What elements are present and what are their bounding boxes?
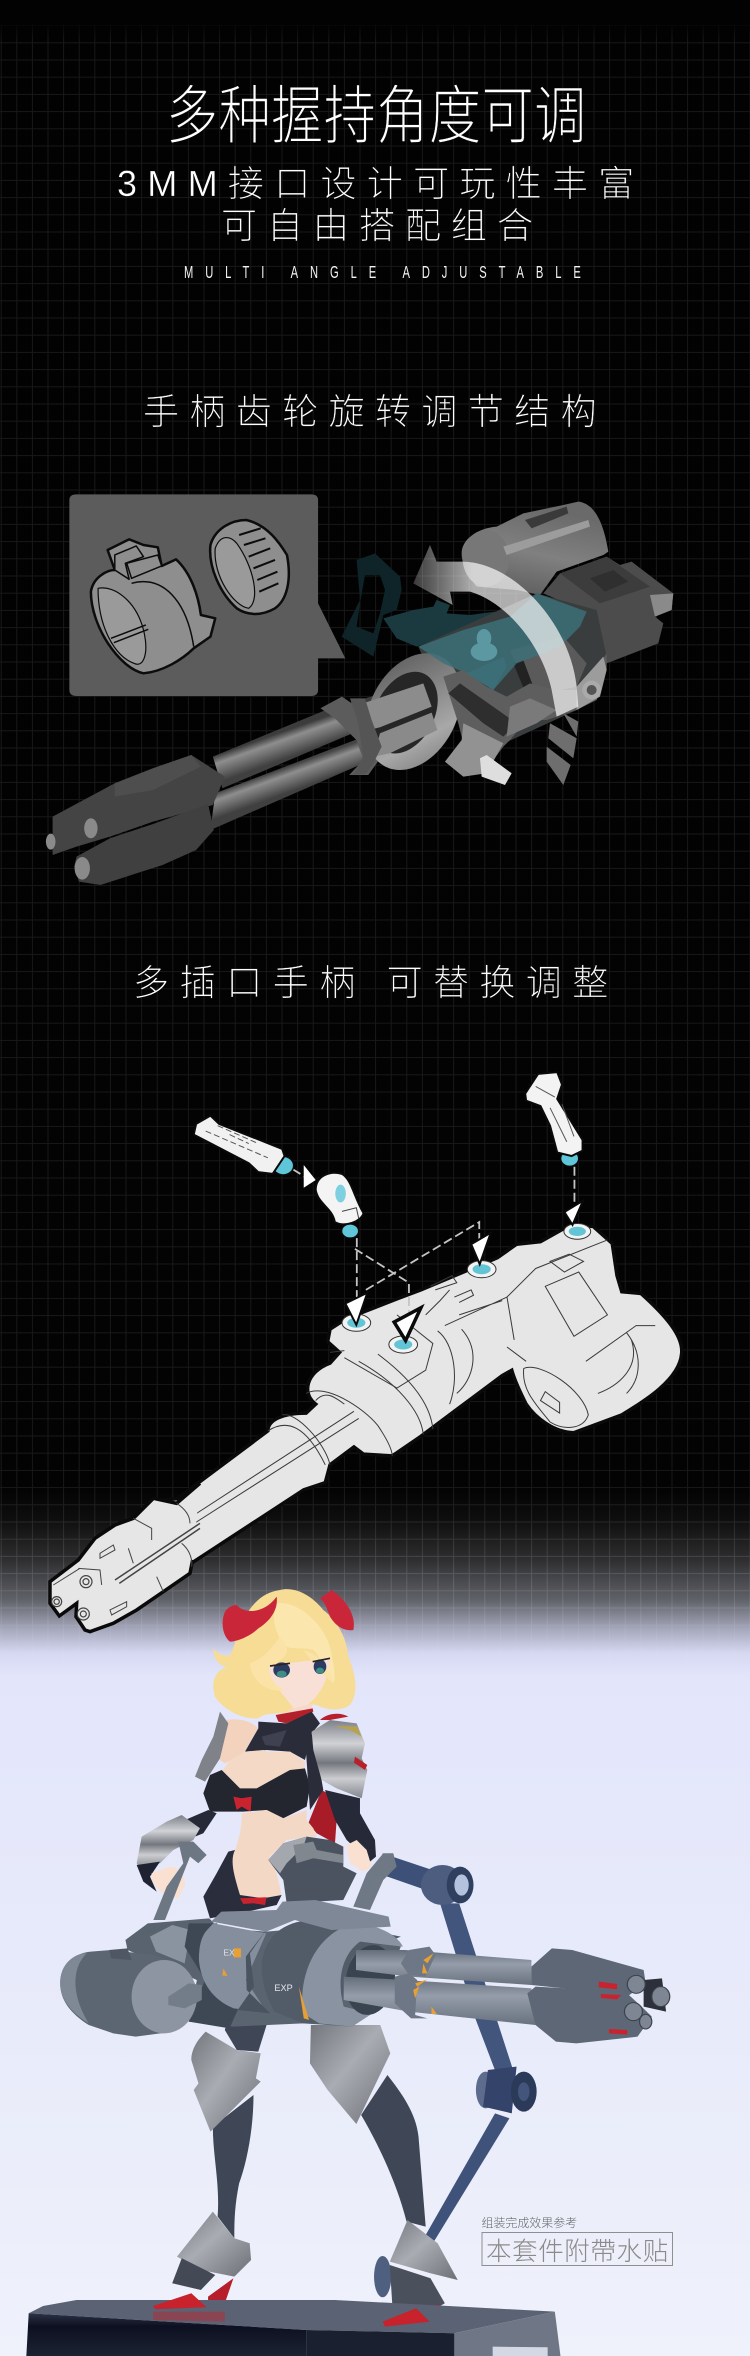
upper body <box>137 1589 397 1920</box>
drum magazine <box>60 1948 202 2037</box>
heading: multi socket handle: 可替换调整 <box>387 962 619 1003</box>
caption: assembled reference: 组装完成效果参考 <box>482 2215 577 2230</box>
right leg <box>310 2025 458 2323</box>
left forearm <box>185 1810 217 1837</box>
hip armor <box>268 1837 357 1903</box>
shoulder skin <box>220 1719 258 1763</box>
hip bow <box>240 1897 267 1905</box>
stand arm upper <box>378 1853 514 2077</box>
left hand <box>151 1867 185 1898</box>
muzzle housing lower <box>527 1987 652 2043</box>
eyes <box>270 1658 330 1678</box>
gatling gun <box>60 1900 670 2043</box>
rendered gatling gun: receiver with rotation arrow <box>342 502 673 786</box>
gun outline body <box>153 1226 682 1565</box>
side lock <box>250 1637 287 1691</box>
clamp joint <box>350 698 382 775</box>
hair <box>213 1589 355 1719</box>
front ring <box>302 1924 403 2027</box>
red labels <box>599 1982 627 2035</box>
barrel clamp ring <box>320 697 383 775</box>
handle parts and arrows <box>194 1072 591 1353</box>
rear mechanism <box>125 1918 221 1980</box>
white plug <box>480 755 512 785</box>
side panel <box>305 1733 323 1810</box>
chest <box>222 1750 305 1790</box>
subtitle line two: 可自由搭配组合 <box>221 205 543 246</box>
teal overlap on body <box>467 657 507 690</box>
teal translucent body <box>418 593 587 690</box>
collar <box>276 1708 313 1723</box>
icon: elbow adapter <box>316 1173 364 1238</box>
muzzle housing upper <box>53 755 225 855</box>
barrel upper <box>213 683 430 788</box>
neck <box>277 1703 313 1723</box>
drum magazine <box>462 502 608 595</box>
line-art gatling gun <box>50 1072 682 1632</box>
direction stripes <box>547 713 578 785</box>
barrel lower <box>210 715 436 830</box>
face <box>268 1658 330 1708</box>
socket ports <box>342 1223 591 1353</box>
receiver core underlay <box>418 593 607 747</box>
left thigh <box>203 1850 282 1918</box>
lower bracket and body <box>443 653 607 777</box>
icon: handle clamp ring <box>91 539 215 673</box>
english tagline: MULTI ANGLE ADJUSTABLE <box>184 262 581 283</box>
muzzle housing upper <box>531 1948 646 1995</box>
left gauntlet <box>137 1815 200 1868</box>
toe shoes over base <box>153 2293 430 2327</box>
ghost handle outline <box>342 553 402 657</box>
right gun grip <box>293 1842 343 1863</box>
ghost elbow <box>383 600 507 647</box>
title: 多种握持角度可调 <box>166 81 587 152</box>
middle cylinder <box>199 1923 266 2012</box>
heading: multi socket handle: 多插口手柄 <box>133 962 366 1003</box>
grid highlight in transition band <box>0 1500 750 1650</box>
background grid <box>0 20 750 1700</box>
barrel shroud disc <box>347 637 480 786</box>
EXP decal: EXP <box>274 1983 293 1993</box>
subtitle line one: 3MM接口设计可玩性丰富 <box>117 163 645 204</box>
display base <box>26 2300 561 2356</box>
drive section <box>510 637 587 697</box>
right sleeve <box>325 1790 376 1862</box>
muzzle housing lower <box>74 804 214 885</box>
dark top <box>245 1712 320 1760</box>
right hand <box>347 1840 372 1872</box>
main cylinder <box>262 1920 401 2023</box>
muzzle center block <box>644 1978 666 2012</box>
ring opening <box>341 1943 399 2017</box>
icon: toothed gear ring <box>210 520 289 614</box>
muzzle bores <box>624 1975 670 2029</box>
stand and legs <box>26 1853 561 2356</box>
red bow <box>233 1797 252 1812</box>
left leg <box>172 2013 270 2307</box>
rear receiver box <box>543 557 673 663</box>
teal bolt <box>471 629 497 661</box>
rotation arrow <box>413 545 578 717</box>
bra <box>203 1768 310 1818</box>
left gun grip <box>153 1842 207 1920</box>
muzzle openings <box>46 818 98 880</box>
figure photo: girl with gatling gun <box>26 1589 670 2356</box>
barrels inside disc <box>363 683 432 731</box>
gun muzzle <box>50 1483 200 1632</box>
gun body underlay <box>125 1923 401 2027</box>
panel: gear detail callout <box>69 494 345 696</box>
right arm armor <box>312 1720 367 1798</box>
red cape <box>308 1790 337 1843</box>
rendered gatling gun: barrels and muzzle <box>46 683 436 885</box>
horns <box>223 1590 354 1642</box>
top box <box>211 1900 391 1932</box>
stand lower rod <box>374 2067 537 2297</box>
abdomen <box>233 1810 317 1898</box>
icon: vertical grip <box>525 1072 583 1166</box>
left shoulder armor <box>195 1712 228 1782</box>
orange markings <box>222 1948 437 2020</box>
upper barrel <box>356 1950 531 1985</box>
EX decal: EX <box>223 1947 235 1957</box>
lower barrel <box>344 1977 536 2025</box>
decal notice box: 本套件附帶水贴 <box>486 2238 669 2266</box>
assembly dashed guides <box>293 1167 574 1315</box>
icon: straight handle <box>194 1116 294 1175</box>
heading: gear structure: 手柄齿轮旋转调节结构 <box>143 391 607 432</box>
insertion arrows <box>304 1165 583 1341</box>
barrel clamps <box>395 1947 436 2018</box>
